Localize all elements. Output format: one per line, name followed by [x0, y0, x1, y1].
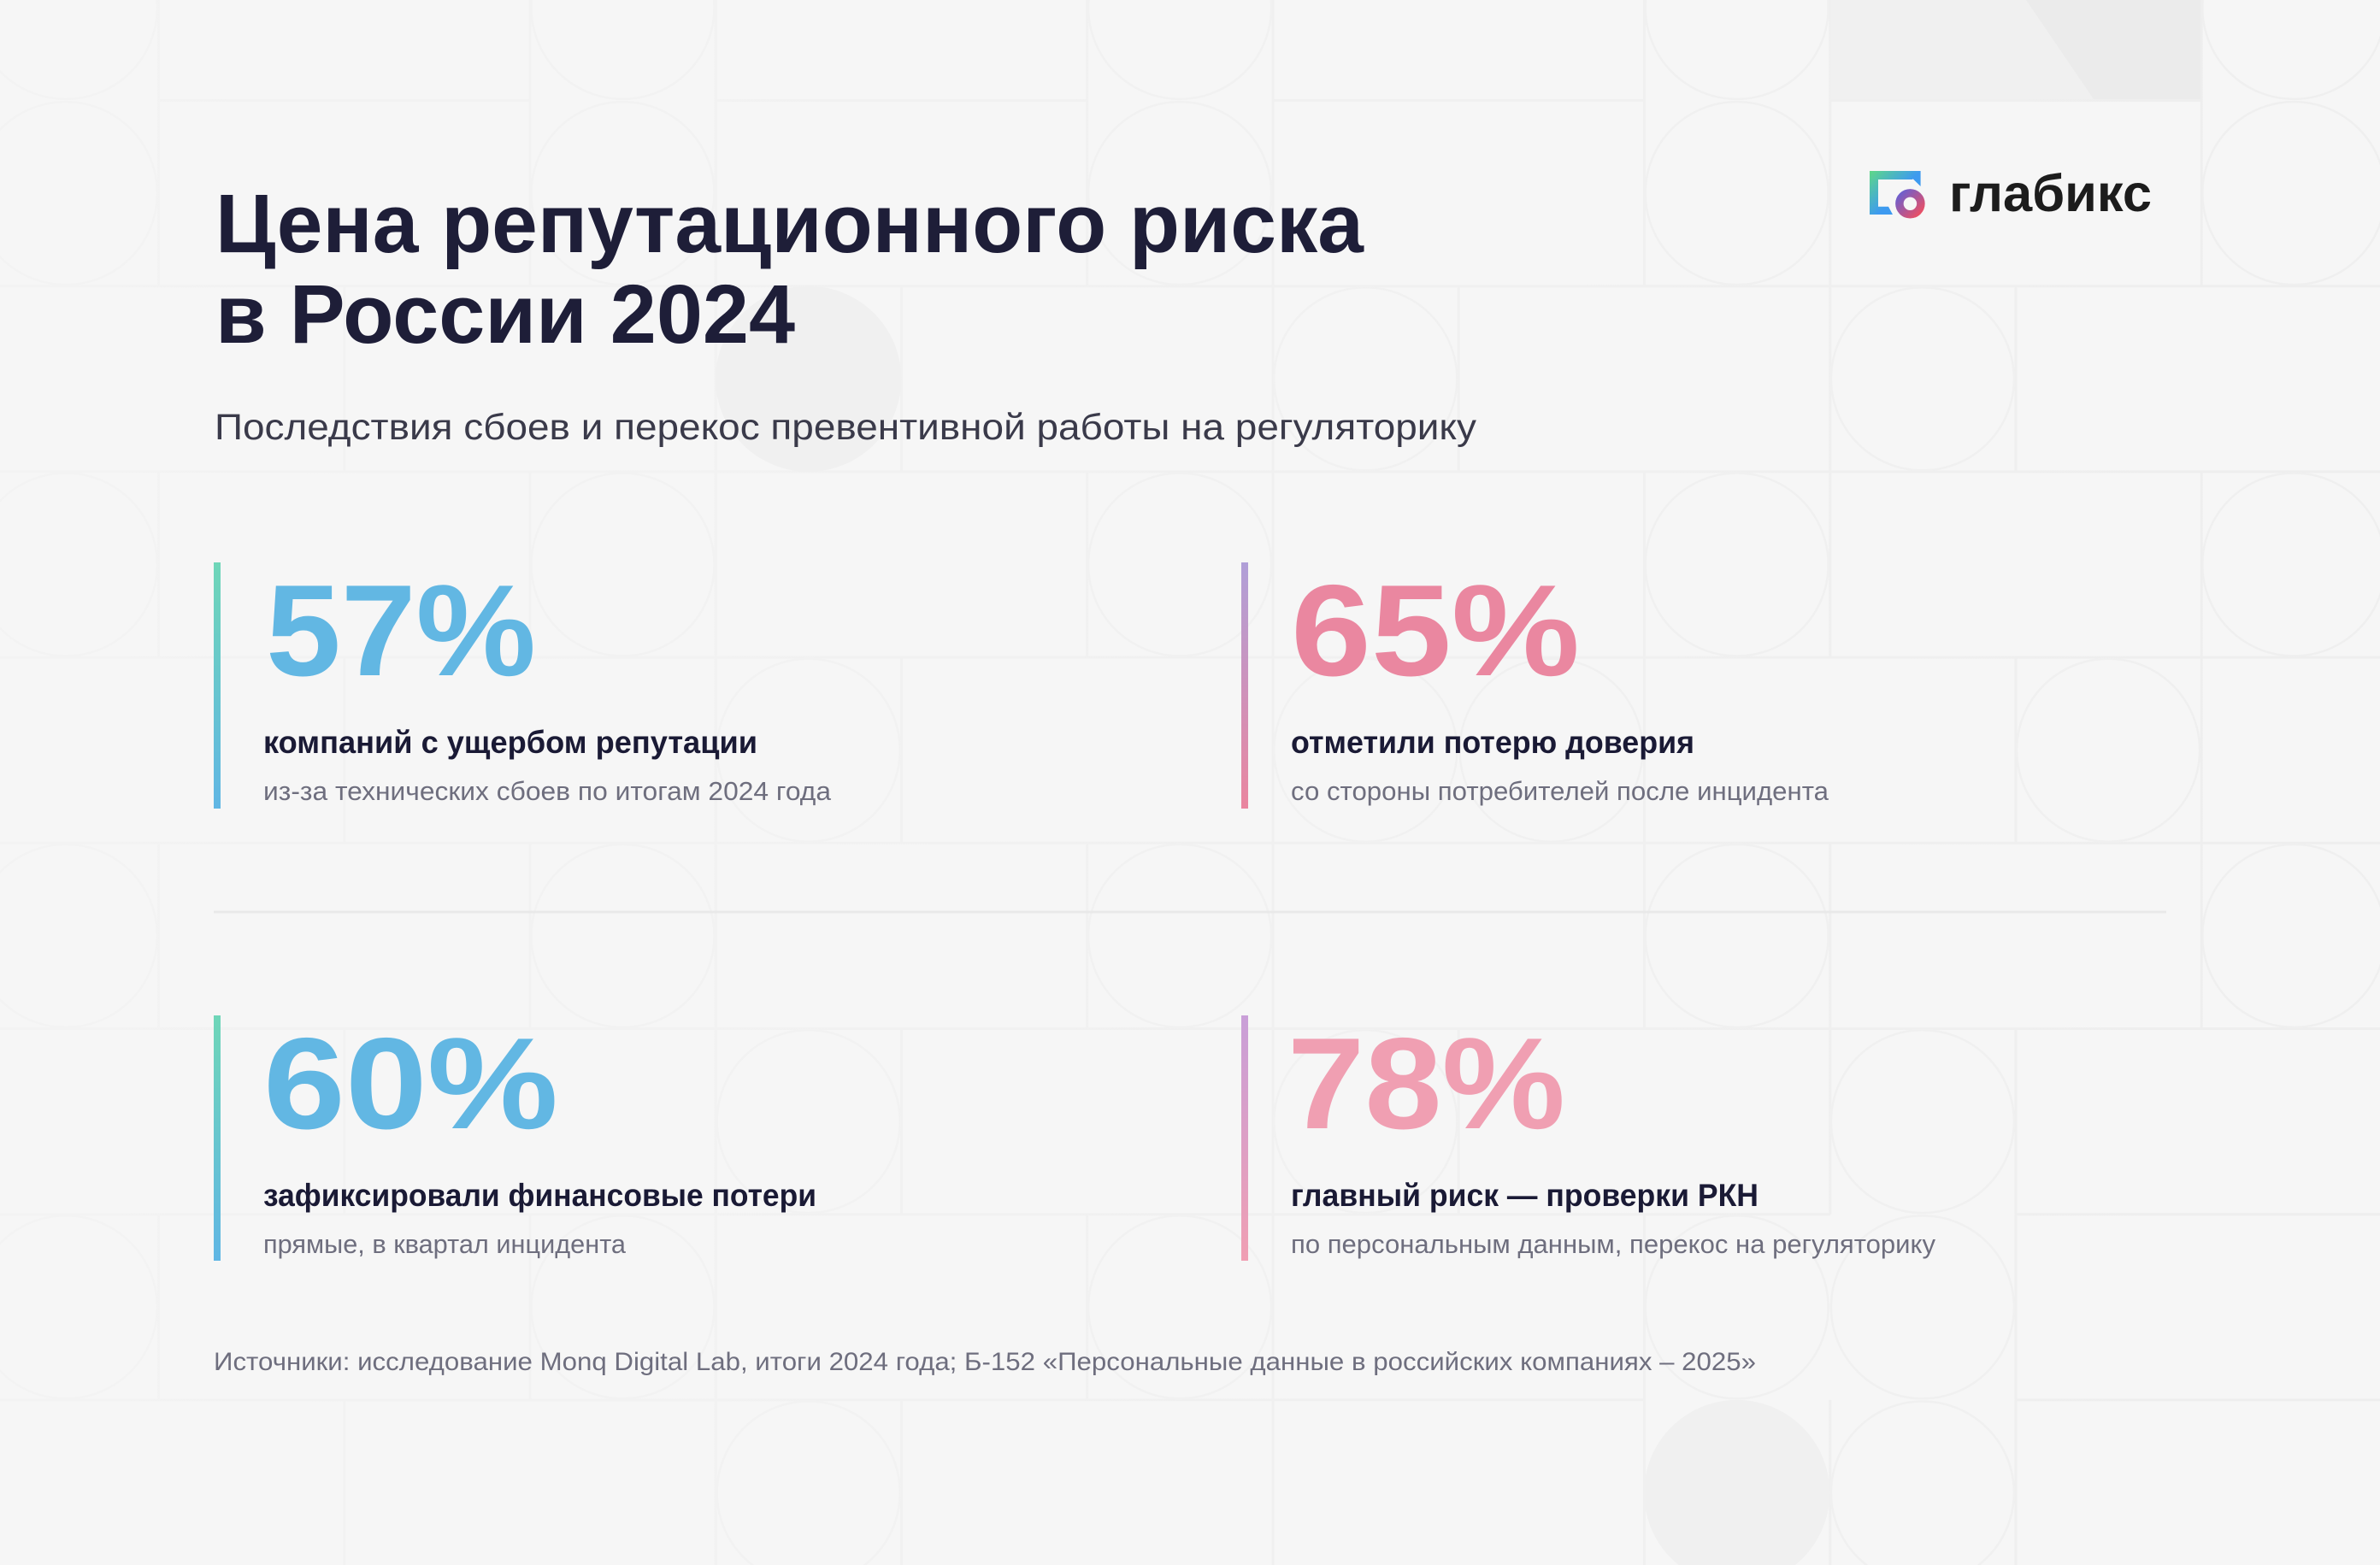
icon: logo mark: [1870, 171, 1921, 215]
subtitle: Последствия сбоев и перекос превентивной работы на регуляторику: [215, 407, 1477, 448]
title: Цена репутационного риска: [215, 177, 1364, 270]
label: отметили потерю доверия: [1291, 725, 1694, 760]
label: компаний с ущербом репутации: [263, 725, 757, 760]
description: по персональным данным, перекос на регуляторику: [1291, 1229, 1935, 1259]
description: из-за технических сбоев по итогам 2024 года: [263, 776, 832, 806]
logo wordmark: глабикс: [1949, 164, 2152, 222]
label: зафиксировали финансовые потери: [263, 1178, 816, 1213]
title: в России 2024: [215, 268, 795, 361]
label: главный риск — проверки РКН: [1291, 1178, 1758, 1213]
accent bar: [1241, 562, 1248, 809]
panel: stat 78%: [1241, 1011, 1935, 1261]
big number: 60%: [263, 1011, 558, 1156]
big number: 57%: [266, 558, 536, 703]
description: со стороны потребителей после инцидента: [1291, 776, 1829, 806]
big number: 65%: [1291, 558, 1580, 703]
sources note: Источники: исследование Monq Digital Lab, итоги 2024 года; Б-152 «Персональные данные в российских компаниях – 2025»: [214, 1348, 1756, 1376]
panel: stat 57%: [214, 558, 832, 809]
accent bar: [214, 1015, 221, 1261]
big number: 78%: [1287, 1011, 1565, 1156]
description: прямые, в квартал инцидента: [263, 1229, 627, 1259]
logo: glabix: [1870, 164, 2152, 222]
panel: stat 65%: [1241, 558, 1829, 809]
title: [215, 177, 1364, 361]
accent bar: [214, 562, 221, 809]
panel: stat 60%: [214, 1011, 816, 1261]
accent bar: [1241, 1015, 1248, 1261]
